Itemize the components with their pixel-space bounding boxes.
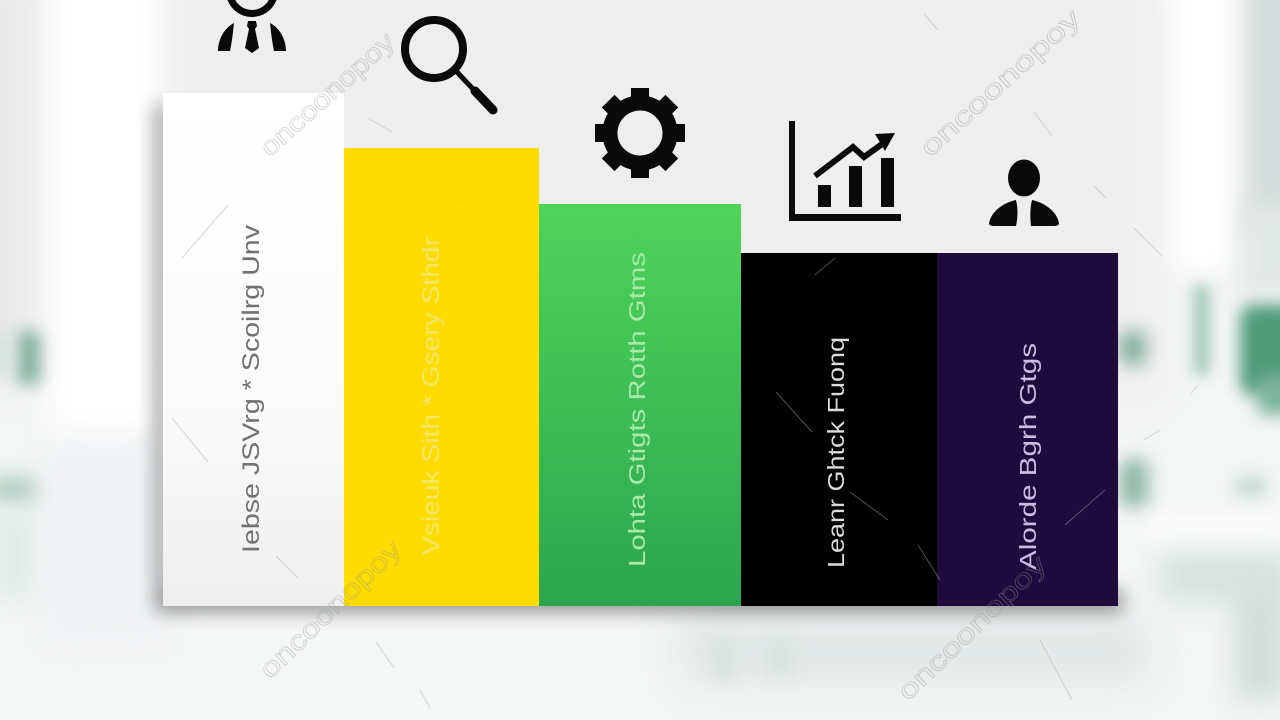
watermark text: oncoonopoy (253, 534, 408, 684)
column 3 label: Lohta Gtigts Rotth Gtms (624, 252, 650, 567)
icon: businessman (218, 0, 286, 53)
watermark text (253, 3, 1087, 706)
column 1 label: Iebse JSVrg * Scoilrg Unv (238, 225, 265, 553)
column 3: green (539, 204, 741, 606)
column 4 label: Leanr Ghtck Fuonq (823, 337, 849, 568)
column 2: yellow (344, 148, 539, 606)
watermark text: oncoonopoy (914, 3, 1087, 162)
column 1: white (163, 93, 344, 606)
icon: magnifying glass (405, 20, 493, 110)
drop shadow behind columns (155, 104, 1123, 612)
icon: gear (595, 88, 685, 178)
column 5: purple (937, 253, 1118, 606)
watermark scratches (172, 14, 1197, 708)
column 2 label: Vsieuk Sith * Gsery Sthdr (418, 237, 445, 555)
column 5 label: Alorde Bgrh Gtgs (1015, 343, 1041, 570)
watermark text: oncoonopoy (891, 549, 1053, 706)
icon: growth chart (789, 121, 901, 221)
column 4: black (741, 253, 937, 606)
watermark text: oncoonopoy (254, 26, 401, 162)
icon: person (989, 160, 1059, 226)
